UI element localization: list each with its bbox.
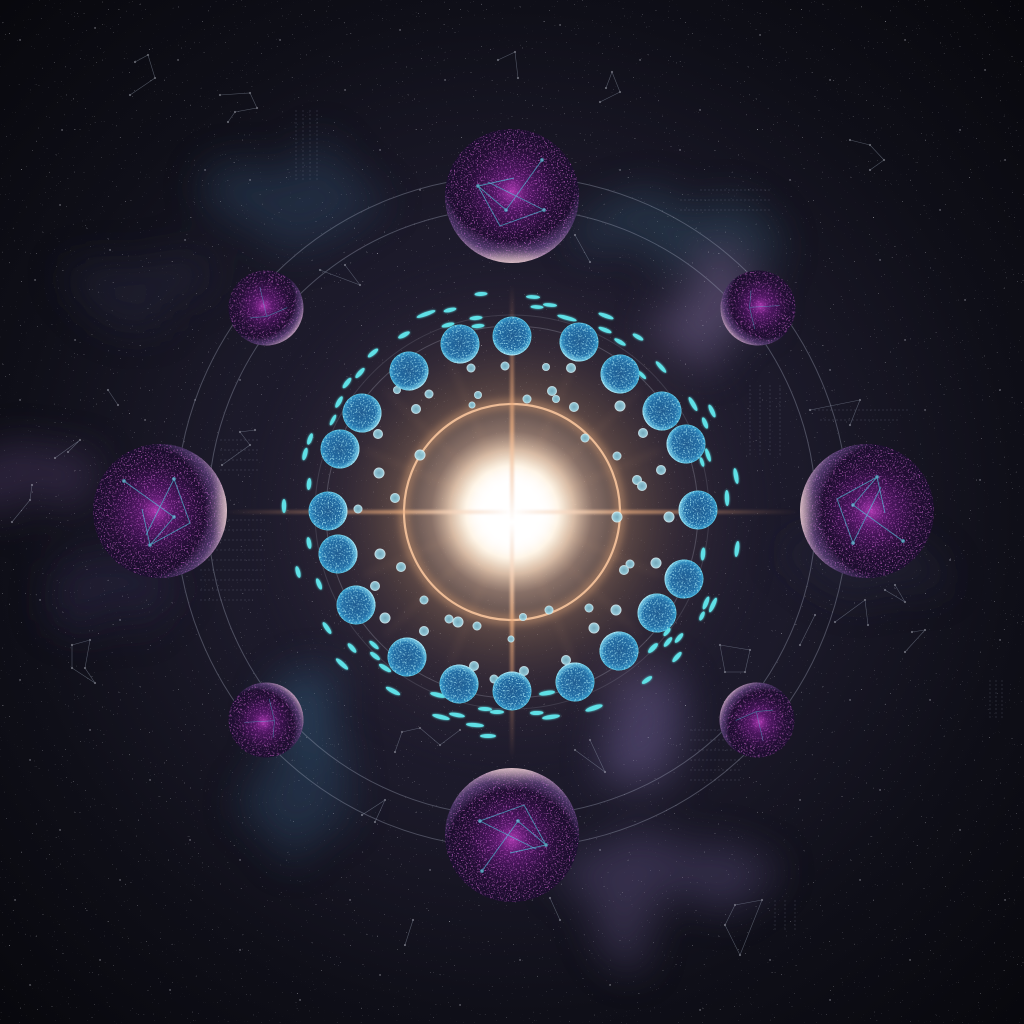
planet: upper right small xyxy=(705,255,811,361)
horizontal flare xyxy=(225,510,799,514)
vertical flare xyxy=(510,285,514,759)
blue spheres ring xyxy=(308,316,718,710)
light rays xyxy=(365,360,660,665)
planet: left large xyxy=(93,444,234,578)
nebula clouds xyxy=(0,155,960,960)
halo ring xyxy=(404,404,620,620)
central star xyxy=(225,242,799,782)
planet: right large xyxy=(793,444,934,578)
cyan orbit dashes xyxy=(282,292,740,738)
core blaze xyxy=(470,470,554,554)
constellations xyxy=(12,52,925,955)
small satellite spheres xyxy=(354,362,674,684)
planet: upper left small xyxy=(213,255,319,361)
planet: bottom large xyxy=(445,761,579,902)
planet: lower right small xyxy=(704,667,810,773)
faint data panels xyxy=(200,110,1002,930)
planet: lower left small xyxy=(213,667,319,773)
planet: top large xyxy=(445,129,579,270)
star glow xyxy=(242,242,782,782)
orbit rings xyxy=(176,176,848,848)
